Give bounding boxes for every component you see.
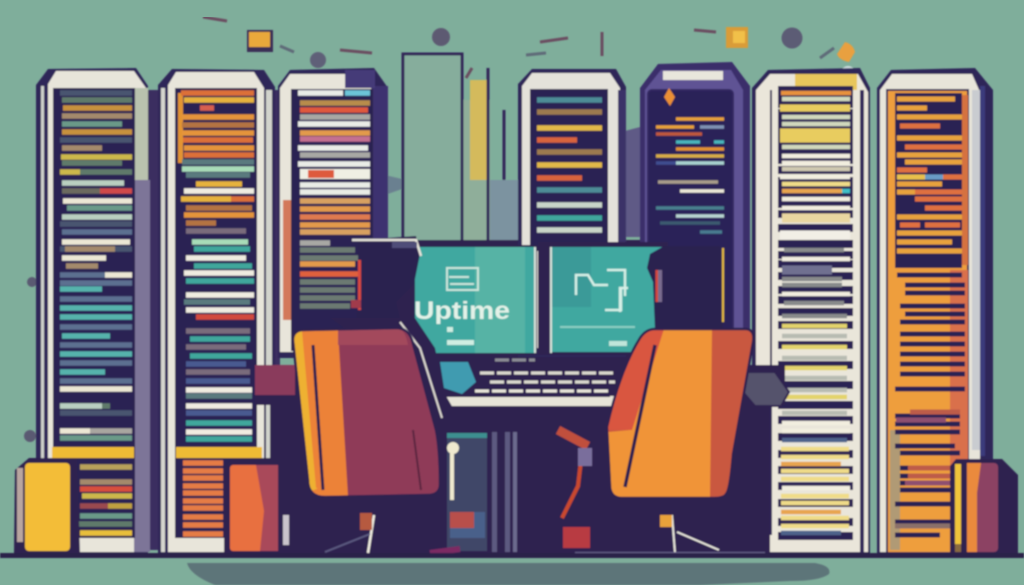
monitor text: Uptime [414,297,510,325]
left chair [293,328,460,553]
left operator [330,236,476,418]
rack 4 status stripes [537,100,602,230]
left yellow case [14,458,80,553]
chair base [620,500,730,553]
rack 2 status stripes [181,93,254,534]
right operator [647,246,723,330]
rack 1 status stripes [60,93,132,533]
rack 3 status stripes [298,93,370,306]
floating paint specks and icons [24,17,855,550]
chair base [367,498,432,553]
rack 7 status stripes [895,99,965,535]
rack 7 [877,68,993,553]
rack 5 [640,62,750,366]
center empty rack frame [372,53,672,400]
rack 1 [36,68,150,553]
middle orange case [224,458,291,553]
under-desk equipment [270,395,770,555]
right-side rack arm [743,372,789,406]
floor shadow [187,563,829,585]
rack 2 [158,69,275,553]
keyboard [475,360,615,391]
rack 5 status stripes [656,119,724,232]
desk [255,360,785,406]
hand [440,362,476,394]
right chair [575,329,765,553]
rack 4 [518,69,626,357]
rack 3 [278,68,388,358]
rack 6 status stripes [778,90,853,536]
right monitor [538,242,668,355]
floor line [0,553,1024,558]
right case [950,459,1018,553]
left monitor [412,245,537,355]
rack 6 [752,68,870,553]
